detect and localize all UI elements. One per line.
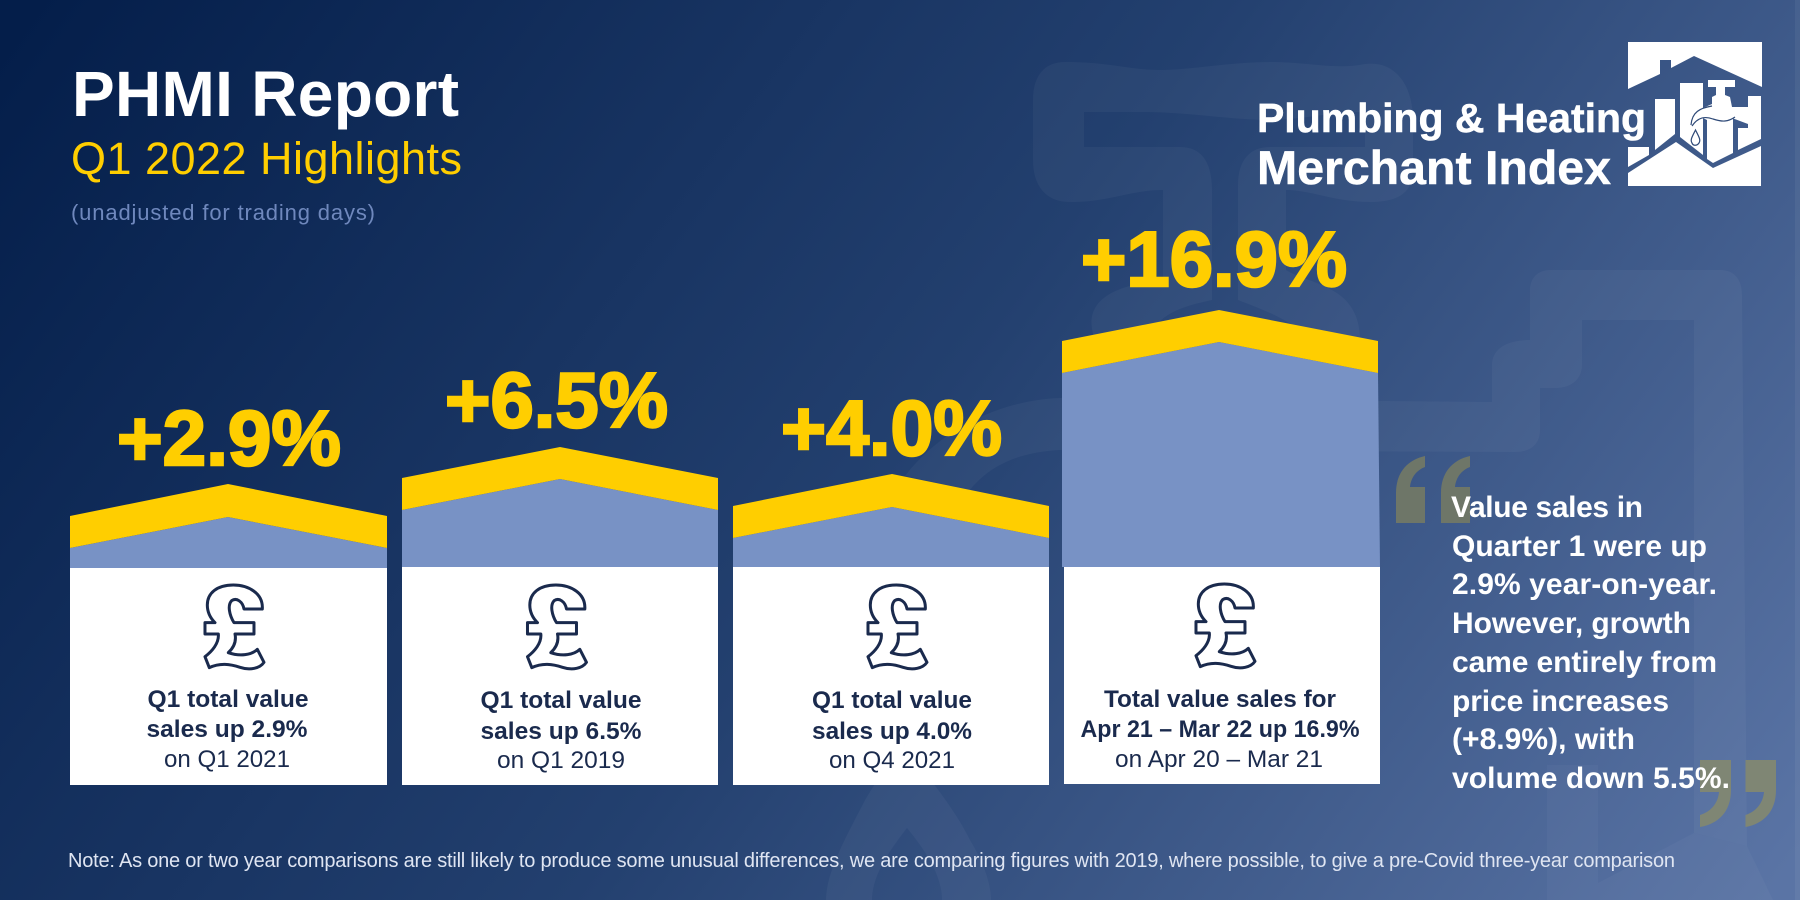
- logo mark: house with tap: [1628, 42, 1762, 186]
- caption: on Q4 2021: [829, 747, 955, 774]
- caption: on Apr 20 – Mar 21: [1115, 746, 1323, 773]
- background pipework watermark: [826, 0, 1800, 900]
- caption: [480, 687, 642, 774]
- quote text: Quarter 1 were up: [1452, 530, 1707, 563]
- quote marks: closing: [1700, 760, 1776, 827]
- quote text: came entirely from: [1452, 646, 1717, 679]
- caption: Q1 total value: [812, 687, 972, 714]
- caption: [812, 687, 972, 774]
- caption: sales up 2.9%: [146, 716, 308, 743]
- quote text: [1451, 491, 1730, 795]
- caption: Total value sales for: [1104, 686, 1336, 713]
- caption: sales up 4.0%: [812, 718, 972, 745]
- percentage: +16.9%: [1081, 215, 1347, 303]
- logo text: Merchant Index: [1257, 141, 1611, 194]
- yellow roof: [402, 447, 718, 510]
- logo text: [1257, 95, 1646, 194]
- white card: [1064, 567, 1380, 784]
- panel: Q1 2021: [70, 394, 387, 785]
- caption: [146, 686, 308, 773]
- title: PHMI Report: [72, 58, 459, 130]
- caption: on Q1 2019: [497, 747, 625, 774]
- quote text: 2.9% year-on-year.: [1452, 568, 1717, 601]
- blue bar: [70, 517, 387, 568]
- icon: pound sign: [527, 585, 586, 669]
- caption: Apr 21 – Mar 22 up 16.9%: [1080, 716, 1360, 743]
- quote text: However, growth: [1452, 607, 1691, 640]
- logo text: Plumbing & Heating: [1257, 95, 1646, 141]
- yellow roof: [733, 474, 1049, 538]
- blue bar: [1062, 342, 1380, 567]
- icon: pound sign: [1196, 584, 1255, 668]
- white card: [70, 568, 387, 785]
- yellow roof: [1062, 310, 1378, 373]
- subtitle: Q1 2022 Highlights: [71, 133, 462, 184]
- white card: [733, 567, 1049, 785]
- logo: [1257, 42, 1762, 194]
- blue bar: [733, 507, 1049, 568]
- panel: Apr 21 – Mar 22: [1062, 215, 1380, 784]
- white card: [402, 567, 718, 785]
- percentage: +4.0%: [781, 384, 1002, 472]
- percentage: +2.9%: [117, 394, 341, 482]
- quote marks: opening: [1396, 456, 1470, 523]
- note: unadjusted: (unadjusted for trading days): [71, 200, 375, 225]
- yellow roof: [70, 484, 387, 548]
- icon: pound sign: [205, 585, 264, 669]
- panel: Q4 2021: [733, 384, 1049, 785]
- percentage: +6.5%: [445, 356, 668, 444]
- panel: Q1 2019: [402, 356, 718, 785]
- caption: sales up 6.5%: [480, 718, 642, 745]
- blue bar: [402, 479, 718, 568]
- caption: on Q1 2021: [164, 746, 290, 773]
- quote text: Value sales in: [1451, 491, 1643, 524]
- caption: [1080, 686, 1360, 773]
- quote text: volume down 5.5%.: [1452, 762, 1730, 795]
- caption: Q1 total value: [148, 686, 308, 713]
- caption: Q1 total value: [480, 687, 642, 714]
- quote text: price increases: [1452, 685, 1669, 718]
- icon: pound sign: [868, 585, 927, 669]
- quote text: (+8.9%), with: [1452, 723, 1635, 756]
- footnote: Note: As one or two year comparisons are still likely to produce some unusual differences, we are comparing figures with 2019, where possible, to give a pre-Covid three-year comparison: [68, 850, 1675, 872]
